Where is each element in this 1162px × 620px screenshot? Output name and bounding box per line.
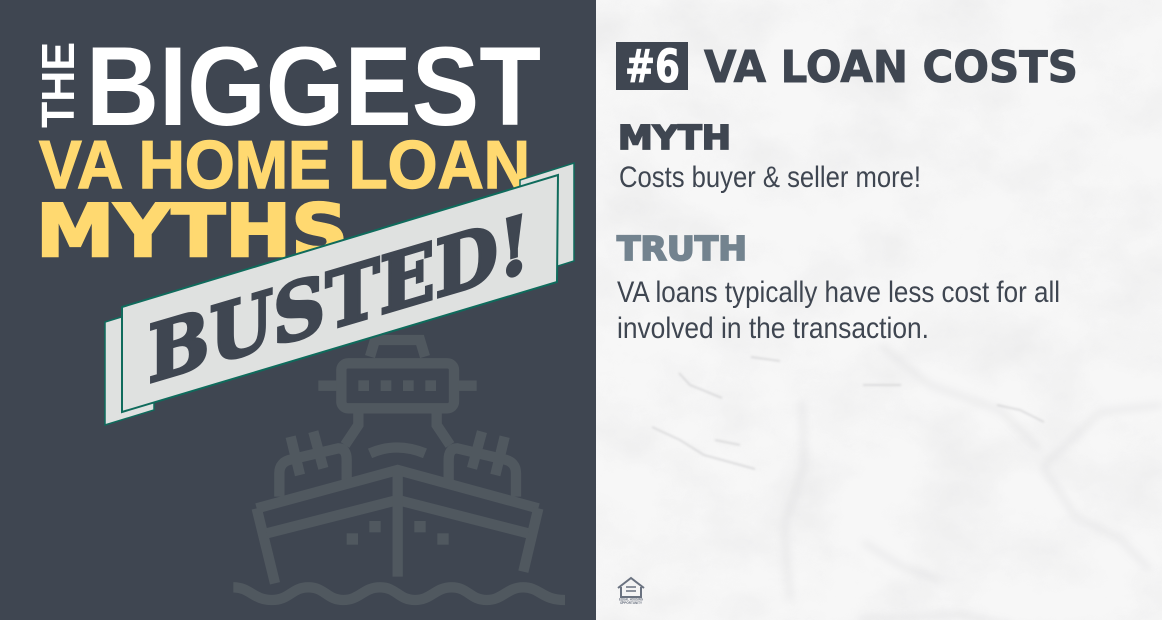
icon: equal housing opportunity: EQUAL HOUSING: [619, 598, 643, 602]
title line: VA HOME LOAN: VA HOME LOAN: [39, 127, 530, 203]
icon: battleship watermark: [233, 340, 565, 600]
text: truth statement: involved in the transaction.: [617, 312, 929, 345]
badge: #6: #6: [625, 40, 680, 93]
banner text: BUSTED!: BUSTED!: [148, 197, 530, 403]
text: myth statement: Costs buyer & seller more!: [619, 161, 921, 194]
heading: MYTH: MYTH: [618, 118, 731, 157]
panel: dark left background: [0, 0, 596, 620]
heading: TRUTH: TRUTH: [617, 229, 747, 268]
title word: MYTHS: MYTHS: [36, 189, 348, 273]
panel: marble right background: [596, 0, 1162, 620]
text: truth statement: VA loans typically have less cost for all: [617, 276, 1060, 309]
title word: THE: THE: [32, 42, 84, 128]
text: truth statement: [617, 276, 1060, 345]
icon: equal housing opportunity: [618, 578, 644, 605]
heading: VA LOAN COSTS: VA LOAN COSTS: [704, 42, 1078, 93]
icon: equal housing opportunity: OPPORTUNITY: [620, 601, 643, 605]
banner: BUSTED ribbon: [105, 163, 574, 425]
title word: BIGGEST: BIGGEST: [86, 24, 541, 149]
